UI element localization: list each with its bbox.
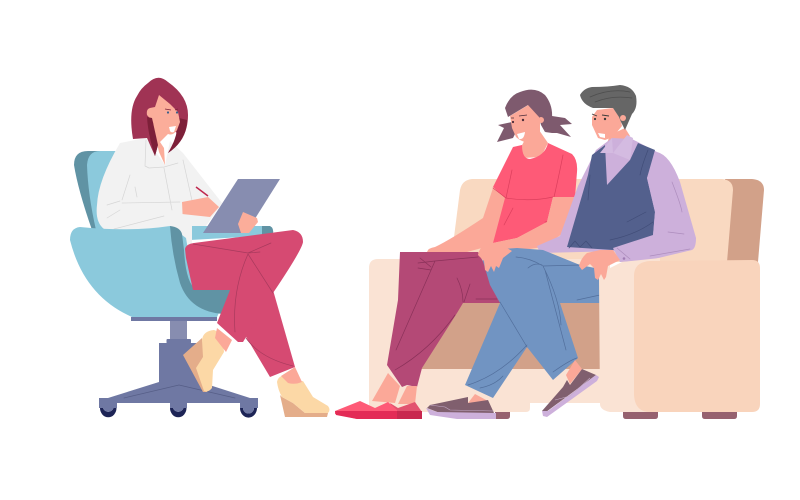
armchair <box>70 138 273 418</box>
therapist hair strand <box>147 117 158 156</box>
right ankle <box>281 367 302 384</box>
sofa feet <box>495 412 737 419</box>
therapist neck and face <box>147 95 180 165</box>
t-shirt <box>493 143 577 243</box>
slippers <box>335 401 422 419</box>
shoes <box>426 369 599 419</box>
sofa back dark side <box>725 179 764 262</box>
jeans <box>465 248 605 398</box>
trousers <box>387 252 505 387</box>
vest <box>567 143 655 250</box>
hair <box>580 85 636 130</box>
chair right armrest <box>190 226 273 240</box>
sleeve <box>613 152 696 262</box>
hand behind clipboard <box>238 212 258 233</box>
client woman <box>335 90 577 419</box>
ankles <box>468 360 582 403</box>
client man <box>426 85 696 419</box>
chair seat bowl <box>70 226 232 321</box>
neck <box>606 128 630 150</box>
hands on knees <box>478 244 620 280</box>
far arm <box>427 188 507 252</box>
collar <box>600 135 633 160</box>
ankles <box>372 373 417 404</box>
facial features <box>511 115 527 139</box>
therapist trousers <box>185 230 303 377</box>
hair <box>505 90 552 132</box>
therapist shirt <box>97 138 222 249</box>
sofa right armrest <box>599 258 760 412</box>
therapist hair <box>131 78 188 156</box>
her hand <box>478 244 512 272</box>
therapist eyes and mouth <box>165 109 178 132</box>
pigtails <box>497 116 572 142</box>
facial features <box>592 114 609 138</box>
sofa <box>369 179 764 419</box>
right foot <box>277 376 330 417</box>
sofa base <box>369 259 610 412</box>
therapist <box>131 78 330 417</box>
ear <box>620 115 626 121</box>
ear <box>538 117 544 123</box>
his hand <box>579 250 620 280</box>
near arm <box>488 197 575 252</box>
sofa seat shade <box>420 303 605 369</box>
face <box>510 104 540 143</box>
neck <box>521 130 548 158</box>
sofa back <box>453 179 733 262</box>
left ankle <box>215 328 232 352</box>
pencil <box>196 187 208 196</box>
hand writing <box>182 197 219 217</box>
clipboard <box>203 179 280 233</box>
therapist hair shade <box>168 118 187 153</box>
torso shirt <box>537 138 660 253</box>
hair strokes <box>590 91 632 102</box>
left shoe <box>183 330 224 392</box>
chair back <box>74 151 125 232</box>
wheels <box>100 408 257 418</box>
chair base <box>99 320 258 418</box>
sleeve cuff <box>173 202 183 226</box>
face <box>592 108 622 140</box>
